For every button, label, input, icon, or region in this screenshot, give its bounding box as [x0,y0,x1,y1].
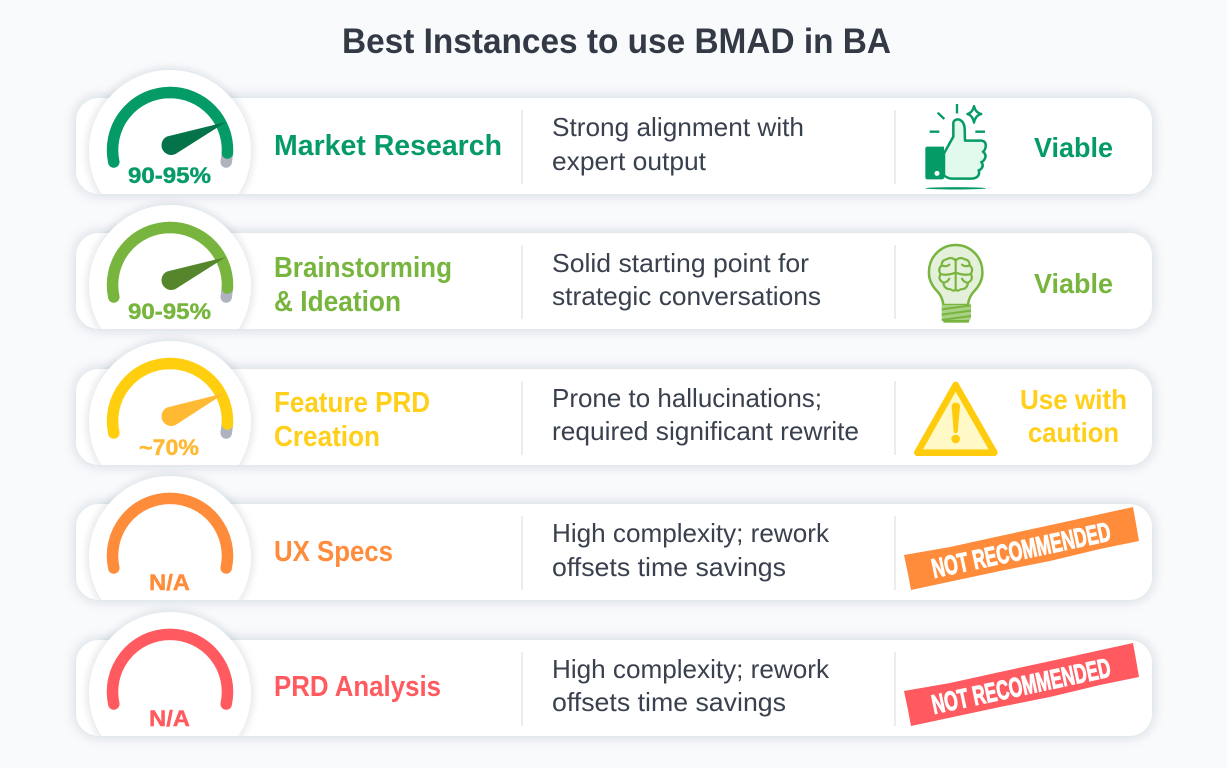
stamp: not recommended [904,643,1139,726]
card background [76,640,1152,736]
gauge: 90-95%: 90-95% [128,299,211,324]
description: Prone to hallucinations; [552,383,822,413]
icon: light bulb with brain [929,245,982,323]
verdict: caution [1028,417,1119,448]
gauge: ~70% [85,337,255,465]
heading [274,387,430,453]
gauge: ~70%: ~70% [139,435,199,460]
description: Solid starting point for [552,248,809,278]
verdict: Viable [1034,132,1113,163]
panel: Market Research [70,66,1158,200]
verdict: Use with [1020,384,1127,415]
description [552,654,830,717]
description: High complexity; rework [552,518,830,548]
heading: PRD Analysis [274,671,441,703]
gauge: 90-95%: 90-95% [128,163,211,188]
description: required significant rewrite [552,416,859,446]
panel: Brainstorming and Ideation [70,201,1158,334]
panel: UX Specs [70,472,1158,606]
heading: Market Research [274,130,502,162]
description [552,518,830,582]
gauge: 90-95% [85,66,255,194]
description: High complexity; rework [552,654,830,684]
gauge: N/A [85,472,255,600]
heading [274,252,452,318]
title: Best Instances to use BMAD in BA [342,22,891,61]
icon: warning triangle [917,385,994,453]
heading: Brainstorming [274,252,452,284]
description: offsets time savings [552,687,786,717]
heading: Feature PRD [274,387,430,419]
stamp: not recommended: NOT RECOMMENDED [929,517,1113,584]
verdict: Viable [1034,268,1113,299]
description: strategic conversations [552,281,821,311]
card background [76,369,1152,465]
heading: & Ideation [274,286,401,318]
description: offsets time savings [552,552,786,582]
description: Strong alignment with [552,112,804,142]
card background [76,504,1152,600]
heading: UX Specs [274,536,393,568]
description: expert output [552,146,707,176]
gauge: N/A: N/A [149,706,190,731]
description [552,248,821,311]
description [552,112,804,176]
heading: Creation [274,421,380,453]
gauge: N/A: N/A [149,570,190,595]
card background [76,233,1152,329]
gauge: 90-95% [85,201,255,329]
stamp: not recommended: NOT RECOMMENDED [929,653,1113,720]
description [552,383,859,446]
panel: PRD Analysis [70,608,1158,742]
icon: thumbs up [925,104,986,189]
gauge: N/A [85,608,255,736]
panel: Feature PRD Creation [70,337,1158,470]
verdict [1020,384,1127,448]
card background [76,98,1152,194]
stamp: not recommended [904,507,1139,590]
